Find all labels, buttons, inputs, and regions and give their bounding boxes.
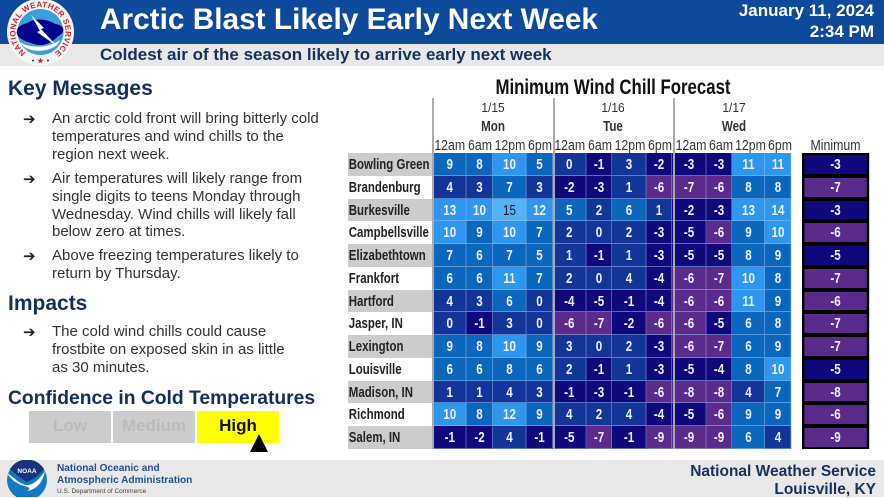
row: Hartford: [348, 290, 792, 312]
chart title: Minimum Wind Chill Forecast: [495, 76, 731, 99]
row: Louisville: [349, 358, 792, 381]
footer band: [0, 460, 884, 497]
row: Hartford: -4: [564, 294, 574, 310]
row: Madison, IN: -8: [714, 385, 724, 401]
row: Brandenburg: 4: [447, 180, 453, 196]
row: Brandenburg: Brandenburg: [349, 180, 421, 196]
row: Salem, IN: 4: [775, 430, 781, 446]
row: Bowling Green: -2: [654, 157, 664, 173]
row: Frankfort: 4: [626, 271, 632, 287]
row: Jasper, IN: 3: [506, 316, 513, 332]
date: 1/17: 1/17: [722, 100, 746, 115]
row: Richmond: -5: [684, 407, 694, 423]
day separator: Wednesday: [673, 98, 675, 449]
row: Louisville: 10: [772, 362, 784, 378]
confidence: low: [29, 411, 111, 443]
row: Louisville: 6: [476, 362, 483, 378]
row: Richmond: -6: [714, 407, 724, 423]
row: Richmond: 10: [443, 407, 456, 423]
icon: NWS logo: NATIONAL WEATHER SERVICE: [10, 2, 72, 57]
row: Campbellsville: 2: [566, 225, 572, 241]
row: Elizabethtown: 1: [626, 248, 632, 264]
row: Bowling Green: -3: [714, 157, 724, 173]
row: Lexington: -7: [714, 339, 724, 355]
row: Salem, IN: -1: [445, 430, 455, 446]
row: Salem, IN: -7: [594, 430, 604, 446]
row: Bowling Green: 8: [476, 157, 483, 173]
row: Frankfort: -7: [714, 271, 724, 287]
row: Madison, IN: 1: [476, 385, 483, 401]
key message 1: temperatures and wind chills to the: [52, 128, 284, 145]
row: Louisville: 1: [626, 362, 632, 378]
key message 3: [52, 247, 299, 282]
day: Wed: Wed: [722, 119, 746, 135]
row: Jasper, IN: -6: [564, 316, 574, 332]
NWS office: [690, 463, 876, 498]
row: Jasper, IN: [348, 312, 792, 335]
row: Lexington: 8: [476, 339, 483, 355]
row: Louisville: -4: [714, 362, 724, 378]
row: Jasper, IN: -2: [624, 316, 634, 332]
row: Burkesville: 1: [656, 203, 662, 219]
hour labels: 12am: [554, 138, 585, 154]
row: Bowling Green: 9: [447, 157, 453, 173]
row: Elizabethtown: 7: [506, 248, 513, 264]
minimum column: -7: [830, 180, 841, 196]
row: Hartford: -4: [654, 294, 664, 310]
row: Brandenburg: -3: [594, 180, 604, 196]
NOAA name: Atmospheric Administration: [57, 474, 192, 486]
hour labels: [434, 138, 792, 154]
heading: impacts: Impacts: [8, 292, 87, 315]
row: Brandenburg: -6: [654, 180, 664, 196]
icon: NOAA logo: [7, 460, 47, 497]
arrow bullet: ➔: [23, 248, 36, 265]
row: Burkesville: 6: [626, 203, 632, 219]
row: Hartford: -1: [624, 294, 634, 310]
row: Louisville: Louisville: [349, 362, 402, 378]
row: Salem, IN: 6: [745, 430, 752, 446]
row: Frankfort: 11: [503, 271, 516, 287]
NWS office: Louisville, KY: [774, 480, 876, 498]
row: Campbellsville: 10: [443, 225, 456, 241]
minimum column: -6: [830, 407, 841, 423]
row: Madison, IN: 4: [506, 385, 513, 401]
row: Burkesville: Burkesville: [349, 203, 410, 219]
row: Elizabethtown: -5: [684, 248, 694, 264]
row: Louisville: 2: [566, 362, 572, 378]
row: Campbellsville: [349, 221, 792, 244]
row: Jasper, IN: -5: [714, 316, 724, 332]
row: Jasper, IN: -7: [594, 316, 604, 332]
row: Campbellsville: -3: [654, 225, 664, 241]
row: Bowling Green: -3: [684, 157, 694, 173]
NOAA name: [57, 463, 192, 486]
row: Lexington: -6: [684, 339, 694, 355]
row: Jasper, IN: -6: [684, 316, 694, 332]
row: Jasper, IN: 0: [536, 316, 543, 332]
row: Frankfort: 6: [476, 271, 483, 287]
hour labels: 6am: [709, 138, 732, 154]
row: Campbellsville: 10: [772, 225, 784, 241]
department: U.S. Department of Commerce: [57, 488, 146, 495]
row: Frankfort: [349, 267, 792, 290]
row: Madison, IN: -3: [594, 385, 604, 401]
row: Lexington: -3: [654, 339, 664, 355]
row: Richmond: 9: [775, 407, 781, 423]
row: Elizabethtown: -3: [654, 248, 664, 264]
marker triangle: [250, 434, 268, 452]
impact text: as 30 minutes.: [52, 359, 150, 376]
row: Bowling Green: -1: [594, 157, 604, 173]
row: Campbellsville: 7: [536, 225, 543, 241]
row: Richmond: -4: [654, 407, 664, 423]
date and time: January 11, 2024: [739, 1, 874, 20]
key message 2: Wednesday. Wind chills will likely fall: [52, 206, 296, 223]
row: Salem, IN: Salem, IN: [349, 430, 400, 446]
date: 1/15: 1/15: [481, 100, 505, 115]
hour labels: 6pm: [768, 138, 791, 154]
hour labels: 6am: [468, 138, 491, 154]
row: Burkesville: 5: [566, 203, 572, 219]
arrow bullet: ➔: [23, 324, 36, 341]
confidence: high: [197, 411, 279, 443]
day separator: Monday: [432, 98, 434, 449]
row: Burkesville: -3: [714, 203, 724, 219]
key message 3: Above freezing temperatures likely to: [52, 247, 299, 264]
row: Campbellsville: 2: [626, 225, 632, 241]
heading: confidence: Confidence in Cold Temperatures: [8, 388, 315, 409]
minimum column: -9: [830, 430, 841, 446]
row: Richmond: 4: [566, 407, 572, 423]
row: Frankfort: -6: [684, 271, 694, 287]
row: Salem, IN: 4: [506, 430, 513, 446]
row: Jasper, IN: Jasper, IN: [349, 316, 403, 332]
row: Salem, IN: [348, 426, 792, 449]
row: Brandenburg: [349, 176, 792, 199]
row: Jasper, IN: 0: [447, 316, 453, 332]
NWS office: National Weather Service: [690, 463, 876, 480]
row: Frankfort: -4: [654, 271, 664, 287]
row: Frankfort: 2: [566, 271, 572, 287]
impact text: The cold wind chills could cause: [52, 323, 266, 340]
row: Lexington: 0: [596, 339, 602, 355]
row: Brandenburg: -6: [714, 180, 724, 196]
row: Elizabethtown: [348, 244, 792, 267]
row: Lexington: 9: [447, 339, 453, 355]
row: Hartford: 9: [775, 294, 781, 310]
row: Elizabethtown: -5: [714, 248, 724, 264]
row: Salem, IN: -5: [564, 430, 574, 446]
row: Frankfort: 8: [775, 271, 781, 287]
row: Lexington: 6: [745, 339, 752, 355]
minimum column: -7: [830, 316, 841, 332]
row: Burkesville: 15: [503, 203, 516, 219]
minimum column heading: Minimum: [811, 138, 860, 154]
row: Bowling Green: 11: [772, 157, 784, 173]
row: Brandenburg: -7: [684, 180, 694, 196]
key message 1: region next week.: [52, 146, 170, 163]
row: Richmond: 4: [626, 407, 632, 423]
row: Lexington: 9: [536, 339, 543, 355]
confidence: medium: [113, 411, 195, 443]
row: Salem, IN: -9: [684, 430, 694, 446]
row: Hartford: -6: [714, 294, 724, 310]
row: Burkesville: 14: [772, 203, 784, 219]
NOAA name: National Oceanic and: [57, 463, 160, 474]
hour labels: 6am: [588, 138, 611, 154]
row: Elizabethtown: 8: [745, 248, 752, 264]
confidence: high: High: [219, 416, 257, 435]
row: Lexington: 3: [566, 339, 572, 355]
row: Brandenburg: 1: [626, 180, 632, 196]
row: Richmond: 9: [536, 407, 543, 423]
row: Burkesville: 12: [533, 203, 546, 219]
row: Elizabethtown: 5: [536, 248, 543, 264]
row: Hartford: -5: [594, 294, 604, 310]
minimum column: -3: [830, 157, 841, 173]
row: Louisville: -1: [594, 362, 604, 378]
key message 3: return by Thursday.: [52, 265, 181, 282]
impact text: [52, 323, 285, 376]
row: Elizabethtown: 9: [775, 248, 781, 264]
date and time: [739, 1, 874, 40]
row: Richmond: 8: [476, 407, 483, 423]
row: Brandenburg: -2: [564, 180, 574, 196]
row: Frankfort: Frankfort: [349, 271, 399, 287]
row: Frankfort: 7: [536, 271, 543, 287]
row: Bowling Green: 5: [536, 157, 543, 173]
row: Bowling Green: 0: [566, 157, 572, 173]
hour labels: 12pm: [494, 138, 525, 154]
hour labels: 12pm: [735, 138, 765, 154]
row: Elizabethtown: 6: [476, 248, 483, 264]
row: Burkesville: 13: [443, 203, 456, 219]
row: Salem, IN: -1: [624, 430, 634, 446]
row: Burkesville: -2: [684, 203, 694, 219]
icon: NWS logo: ★: [37, 57, 44, 65]
row: Frankfort: 6: [447, 271, 453, 287]
icon: NOAA logo: NOAA: [17, 468, 37, 475]
row: Burkesville: 10: [473, 203, 486, 219]
row: Elizabethtown: Elizabethtown: [349, 248, 426, 264]
row: Richmond: 2: [596, 407, 602, 423]
row: Campbellsville: 9: [745, 225, 752, 241]
hour labels: 12am: [434, 138, 465, 154]
minimum column: -7: [830, 271, 841, 287]
subtitle band: [0, 44, 884, 66]
row: Hartford: 3: [476, 294, 483, 310]
row: Brandenburg: 8: [745, 180, 752, 196]
day: Mon: Mon: [481, 119, 505, 135]
row: Frankfort: 0: [596, 271, 602, 287]
minimum column: -7: [830, 339, 841, 355]
row: Frankfort: 10: [742, 271, 755, 287]
row: Hartford: 4: [447, 294, 453, 310]
row: Madison, IN: [348, 381, 792, 403]
row: Salem, IN: -9: [714, 430, 724, 446]
row: Richmond: [349, 403, 792, 426]
date: 1/16: 1/16: [601, 100, 625, 115]
row: Campbellsville: -6: [714, 225, 724, 241]
minimum column: -6: [830, 294, 841, 310]
day: Tue: Tue: [603, 119, 623, 135]
row: Brandenburg: 3: [536, 180, 543, 196]
arrow bullet: ➔: [23, 111, 36, 128]
row: Richmond: 9: [745, 407, 752, 423]
minimum column: -5: [830, 248, 841, 264]
minimum column: -6: [830, 225, 841, 241]
row: Madison, IN: 3: [536, 385, 543, 401]
row: Louisville: 6: [447, 362, 453, 378]
key message 2: [52, 170, 302, 240]
hour labels: 6pm: [528, 138, 551, 154]
row: Richmond: Richmond: [349, 407, 405, 423]
row: Madison, IN: -8: [684, 385, 694, 401]
minimum column: -8: [830, 385, 841, 401]
row: Campbellsville: -5: [684, 225, 694, 241]
row: Brandenburg: 7: [506, 180, 513, 196]
row: Madison, IN: 1: [447, 385, 453, 401]
row: Elizabethtown: -1: [594, 248, 604, 264]
key message 2: below zero at times.: [52, 223, 185, 240]
row: Salem, IN: -1: [534, 430, 545, 446]
key message 1: [52, 110, 319, 163]
row: Bowling Green: 3: [626, 157, 632, 173]
row: Madison, IN: -1: [624, 385, 634, 401]
row: Hartford: 6: [506, 294, 513, 310]
row: Salem, IN: -9: [654, 430, 664, 446]
row: Madison, IN: Madison, IN: [349, 385, 413, 401]
row: Salem, IN: -2: [474, 430, 485, 446]
row: Jasper, IN: 8: [775, 316, 781, 332]
row: Lexington: 10: [503, 339, 516, 355]
row: Madison, IN: -6: [654, 385, 664, 401]
subtitle: Coldest air of the season likely to arrive early next week: [100, 45, 552, 64]
key message 1: An arctic cold front will bring bitterly cold: [52, 110, 319, 127]
row: Louisville: 8: [506, 362, 513, 378]
row: Brandenburg: 3: [476, 180, 483, 196]
row: Madison, IN: 4: [745, 385, 752, 401]
row: Madison, IN: 7: [775, 385, 781, 401]
minimum column: -5: [830, 362, 841, 378]
row: Elizabethtown: 7: [447, 248, 453, 264]
row: Louisville: 6: [536, 362, 543, 378]
impact text: frostbite on exposed skin in as little: [52, 341, 285, 358]
row: Campbellsville: 9: [476, 225, 483, 241]
row: Lexington: 2: [626, 339, 632, 355]
hour labels: 12am: [675, 138, 706, 154]
row: Jasper, IN: 6: [745, 316, 752, 332]
row: Burkesville: 2: [596, 203, 602, 219]
hour labels: 12pm: [614, 138, 645, 154]
day separator: Tuesday: [552, 98, 554, 449]
row: Hartford: Hartford: [349, 294, 394, 310]
row: Campbellsville: 0: [596, 225, 602, 241]
row: Campbellsville: 10: [503, 225, 516, 241]
row: Lexington: Lexington: [349, 339, 403, 355]
confidence: medium: Medium: [122, 416, 186, 435]
row: Bowling Green: 10: [503, 157, 516, 173]
row: Louisville: 8: [745, 362, 752, 378]
row: Bowling Green: [348, 153, 792, 176]
row: Louisville: -3: [654, 362, 664, 378]
row: Bowling Green: 11: [742, 157, 755, 173]
row: Hartford: -6: [684, 294, 694, 310]
row: Bowling Green: Bowling Green: [349, 157, 430, 173]
row: Lexington: 9: [775, 339, 781, 355]
hour labels: 6pm: [648, 138, 671, 154]
row: Jasper, IN: -6: [654, 316, 664, 332]
header band: [0, 0, 884, 44]
title: Arctic Blast Likely Early Next Week: [100, 3, 598, 36]
heading: key messages: Key Messages: [8, 77, 153, 100]
row: Elizabethtown: 1: [566, 248, 572, 264]
row: Richmond: 12: [503, 407, 516, 423]
row: Louisville: -5: [684, 362, 694, 378]
date and time: 2:34 PM: [810, 22, 874, 40]
confidence: low: Low: [53, 416, 87, 435]
row: Hartford: 11: [742, 294, 755, 310]
row: Jasper, IN: -1: [474, 316, 485, 332]
key message 2: Air temperatures will likely range from: [52, 170, 302, 187]
row: Madison, IN: -1: [564, 385, 574, 401]
key message 2: single digits to teens Monday through: [52, 188, 300, 205]
row: Lexington: [348, 335, 792, 358]
minimum column: -3: [830, 203, 841, 219]
row: Brandenburg: 8: [775, 180, 781, 196]
row: Burkesville: 13: [742, 203, 755, 219]
row: Burkesville: [348, 199, 792, 221]
arrow bullet: ➔: [23, 171, 36, 188]
row: Campbellsville: Campbellsville: [349, 225, 429, 241]
row: Hartford: 0: [536, 294, 543, 310]
